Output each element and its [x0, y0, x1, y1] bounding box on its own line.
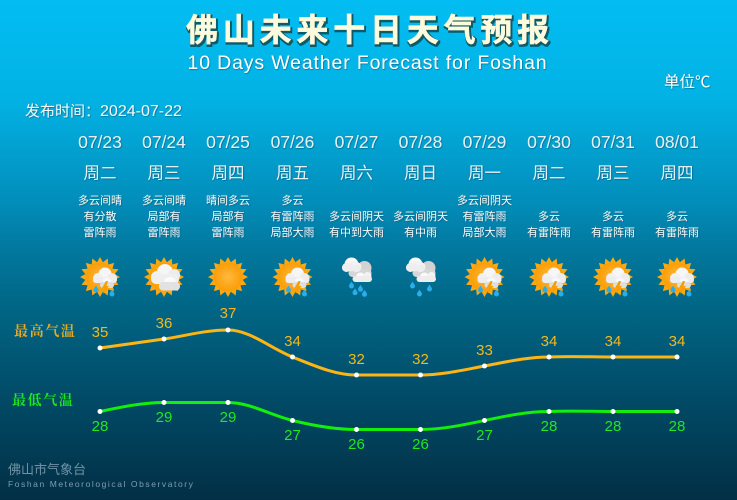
weekday row: 周一 — [468, 164, 501, 182]
footer: observatory name: Foshan Meteorological Observatory — [8, 479, 194, 489]
weather descriptions: 有分散 — [84, 209, 116, 223]
weather descriptions: 多云间阴天 — [457, 193, 512, 207]
weekday row: 周日 — [404, 164, 437, 182]
chart: high temperature line: 37 — [220, 305, 236, 322]
chart: high temperature line: 32 — [348, 351, 365, 368]
weather descriptions — [78, 193, 699, 239]
weekday row: 周二 — [84, 164, 116, 182]
date row: 07/26 — [271, 132, 314, 152]
weather descriptions: 有雷阵雨 — [527, 225, 571, 239]
chart: low temperature line: 26 — [412, 436, 429, 453]
weekday row: 周五 — [276, 164, 309, 182]
weekday row: 周四 — [660, 164, 694, 182]
icon: cloud with heavy rain 07/27 — [342, 258, 372, 297]
label: lowest temperature: 最低气温 — [12, 390, 74, 410]
subtitle: 10 Days Weather Forecast for Foshan — [188, 52, 547, 74]
weather descriptions: 晴间多云 — [206, 193, 250, 207]
chart: high temperature line: 35 — [92, 324, 108, 341]
icon: thunderstorm with sun 07/26 — [272, 257, 312, 297]
weather descriptions: 多云间晴 — [78, 193, 122, 207]
chart: low temperature line: 26 — [348, 436, 365, 453]
chart: high temperature line — [92, 305, 685, 378]
icon: thunderstorm with sun 08/01 — [657, 257, 697, 297]
chart: low temperature line: 29 — [156, 409, 172, 426]
icon: cloudy with sun 07/24 — [144, 257, 184, 297]
weather descriptions: 局部有 — [148, 209, 180, 223]
chart: low temperature line: 28 — [541, 418, 557, 435]
chart: high temperature line: 36 — [156, 315, 172, 332]
icon: cloud with moderate rain 07/28 — [406, 258, 436, 296]
icon: sun 07/25 — [208, 257, 248, 297]
weather descriptions: 有中到大雨 — [329, 225, 384, 239]
icon: thunderstorm with sun 07/23 — [80, 257, 120, 297]
icon: thunderstorm with sun 07/30 — [529, 257, 569, 297]
chart: high temperature line: 34 — [605, 333, 621, 350]
weekday row: 周六 — [340, 164, 373, 182]
weather descriptions: 雷阵雨 — [148, 225, 180, 239]
date row: 07/25 — [206, 132, 250, 152]
chart: high temperature line: 34 — [284, 333, 301, 350]
chart: high temperature line: 33 — [476, 342, 493, 359]
date row: 07/28 — [399, 132, 442, 152]
weekday row: 周三 — [596, 164, 630, 182]
footer: observatory name — [8, 462, 194, 489]
weather descriptions: 雷阵雨 — [84, 225, 116, 239]
date row: 07/31 — [591, 132, 635, 152]
weather descriptions: 多云 — [602, 209, 624, 223]
chart: high temperature line: 32 — [412, 351, 429, 368]
weather descriptions: 有中雨 — [404, 225, 437, 239]
date row — [78, 132, 699, 152]
weekday row: 周四 — [212, 164, 244, 182]
weekday row — [84, 164, 694, 182]
weather descriptions: 多云 — [282, 193, 304, 207]
weekday row: 周二 — [532, 164, 566, 182]
weather descriptions: 多云间晴 — [142, 193, 186, 207]
chart: low temperature line: 29 — [220, 409, 236, 426]
chart: low temperature line — [92, 400, 685, 453]
label: highest temperature: 最高气温 — [14, 321, 76, 341]
chart: low temperature line: 28 — [605, 418, 621, 435]
weather descriptions: 局部大雨 — [462, 225, 506, 239]
date row: 07/27 — [335, 132, 378, 152]
unit label: 单位℃ — [664, 73, 711, 91]
chart: low temperature line: 28 — [92, 418, 108, 435]
date row: 07/23 — [78, 132, 122, 152]
date row: 07/29 — [463, 132, 506, 152]
chart: high temperature line: 34 — [541, 333, 557, 350]
footer: observatory name: 佛山市气象台 — [8, 462, 86, 477]
weather descriptions: 局部有 — [212, 209, 244, 223]
weather descriptions: 有雷阵雨 — [655, 225, 699, 239]
chart: low temperature line: 27 — [476, 427, 493, 444]
weather descriptions: 局部大雨 — [270, 225, 314, 239]
date row: 07/30 — [527, 132, 571, 152]
weather descriptions: 多云间阴天 — [329, 209, 384, 223]
weather descriptions: 多云间阴天 — [393, 209, 448, 223]
weekday row: 周三 — [148, 164, 180, 182]
weather descriptions: 有雷阵雨 — [462, 209, 506, 223]
date row: 08/01 — [655, 132, 699, 152]
icon: thunderstorm with sun 07/31 — [593, 257, 633, 297]
weather descriptions: 雷阵雨 — [212, 225, 244, 239]
weather descriptions: 多云 — [538, 209, 560, 223]
date row: 07/24 — [142, 132, 186, 152]
chart: low temperature line: 27 — [284, 427, 301, 444]
chart: high temperature line: 34 — [669, 333, 685, 350]
title: 佛山未来十日天气预报 — [186, 12, 554, 48]
weather descriptions: 有雷阵雨 — [270, 209, 314, 223]
weather descriptions: 多云 — [666, 209, 688, 223]
publish time: 发布时间：2024-07-22 — [25, 103, 182, 120]
chart: low temperature line: 28 — [669, 418, 685, 435]
icon: thunderstorm with sun 07/29 — [464, 257, 504, 297]
weather descriptions: 有雷阵雨 — [591, 225, 635, 239]
